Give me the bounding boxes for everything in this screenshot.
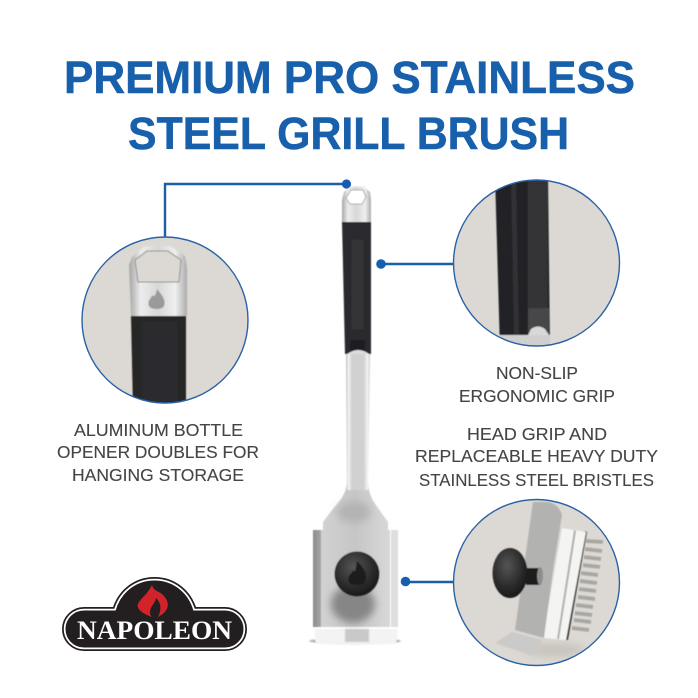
opener hole: [135, 251, 181, 282]
knob shadow: [331, 585, 375, 623]
knob flame: [349, 561, 366, 585]
caption: grip: ERGONOMIC GRIP: [459, 386, 615, 406]
right bracket: [391, 530, 398, 627]
left bracket: [313, 530, 321, 627]
opener head: [342, 186, 371, 223]
grip body: [495, 175, 550, 350]
grip texture: [142, 322, 178, 404]
caption: head and bristles: [415, 424, 658, 490]
caption: grip: NON-SLIP: [496, 363, 578, 383]
head block: [543, 528, 586, 640]
caption: head and bristles: REPLACEABLE HEAVY DUTY: [415, 446, 658, 466]
caption: bottle opener: [57, 420, 259, 485]
plate and flare: [321, 480, 390, 627]
foot shadow: [309, 638, 401, 644]
lower panel: [528, 308, 549, 335]
connector: bottle opener: [165, 179, 351, 238]
silver shaft: [498, 334, 551, 346]
engraved flame: [148, 289, 165, 309]
grip stripe: [512, 184, 519, 334]
logo wordmark: NAPOLEON: [77, 616, 232, 645]
bristle block edge: [566, 531, 587, 640]
caption: head and bristles: HEAD GRIP AND: [467, 424, 607, 444]
logo flame: [138, 585, 168, 617]
bristles: [572, 541, 603, 630]
product photo: grill brush: [309, 186, 401, 644]
connector: grip: [376, 259, 454, 269]
caption: bottle opener: HANGING STORAGE: [72, 465, 244, 485]
infographic canvas: [58, 61, 658, 666]
logo: Napoleon: [66, 581, 243, 647]
foot: [315, 629, 398, 644]
knob stem: [526, 568, 540, 585]
panel: bottle opener detail: [82, 237, 248, 410]
title: STEEL GRILL BRUSH: [128, 108, 569, 159]
foot center mark: [345, 629, 369, 642]
grip silver notch: [347, 350, 369, 354]
rubber grip: [131, 316, 186, 410]
textured panel: [528, 175, 548, 308]
knob: [492, 548, 528, 598]
panel: brush head detail: [454, 500, 620, 666]
silver notch: [528, 326, 549, 335]
caption: bottle opener: OPENER DOUBLES FOR: [57, 442, 259, 462]
caption: grip: [459, 363, 615, 406]
grip: [342, 222, 371, 354]
plate: [515, 502, 562, 638]
grip window: [350, 340, 365, 350]
opener hole: [346, 190, 366, 204]
grip texture: [351, 240, 364, 330]
title: [64, 52, 635, 159]
opener metal: [129, 246, 187, 316]
shaft: [346, 354, 370, 490]
ground shadow: [525, 643, 585, 657]
caption: head and bristles: STAINLESS STEEL BRISTLES: [419, 470, 654, 490]
head block stripe: [557, 530, 576, 639]
caption: bottle opener: ALUMINUM BOTTLE: [74, 420, 243, 440]
flare shading: [337, 501, 371, 523]
connector: head: [401, 577, 454, 586]
plate foot: [495, 632, 542, 655]
knob: [334, 552, 380, 596]
title: PREMIUM PRO STAINLESS: [64, 52, 635, 103]
washer: [537, 567, 543, 585]
panel: grip detail: [454, 175, 620, 350]
